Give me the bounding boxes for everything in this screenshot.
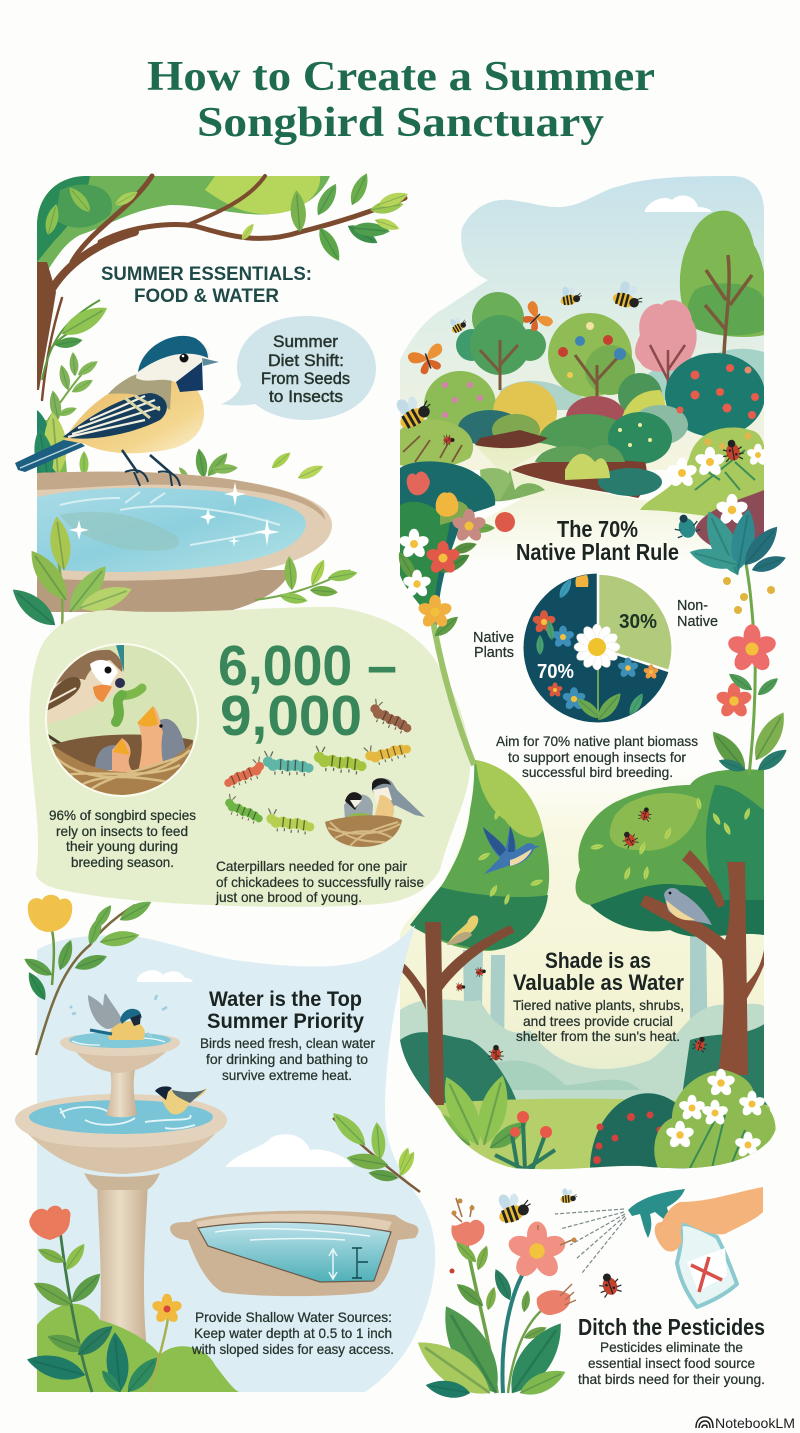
text: birds need water: for drinking and bathing to (206, 1051, 368, 1067)
hand (655, 1187, 763, 1252)
panel: water top priority blue (15, 895, 435, 1397)
text: pesticides eliminate: Pesticides eliminate the (600, 1339, 743, 1355)
green tree (456, 292, 546, 390)
tree trunk right (640, 850, 764, 1075)
circle: parent bird feeding chicks (44, 643, 199, 797)
text: pesticides eliminate: essential insect food source (588, 1355, 755, 1371)
pie labels: Native (677, 614, 718, 630)
icon: chickadee on bath rim (15, 336, 219, 486)
pie labels: Native (473, 630, 514, 646)
pie labels (473, 598, 718, 661)
panel: insect food pale green blob (29, 607, 470, 907)
big number: 9,000 (220, 684, 362, 748)
right branch (327, 1107, 420, 1192)
right flower vine (687, 506, 792, 776)
side sprig leaves (30, 300, 326, 483)
text: 96 percent: rely on insects to feed (56, 823, 188, 839)
speech bubble: summer diet shift: Summer (273, 333, 339, 351)
heading: water top priority: Summer Priority (207, 1009, 364, 1033)
text: caterpillars needed: Caterpillars needed for one pair (216, 858, 407, 874)
heading: shade is as valuable: Valuable as Water (513, 970, 684, 995)
heading: 70% rule: Native Plant Rule (516, 539, 679, 565)
forest insects (456, 806, 710, 1060)
speech bubble: summer diet shift: Diet Shift: (268, 352, 344, 370)
panel: ditch the pesticides (409, 1187, 765, 1406)
heading: water top priority: Water is the Top (209, 987, 362, 1011)
big number (218, 634, 397, 748)
shallow water basin diagram (170, 1211, 418, 1296)
tree branch (42, 176, 405, 400)
pie chart 70/30: 30% (619, 611, 657, 633)
caterpillar (122, 688, 142, 695)
pie labels: Plants (474, 645, 514, 661)
insects and butterflies (390, 279, 745, 542)
title: Songbird Sanctuary (197, 100, 604, 146)
flowers (409, 1198, 576, 1406)
speech bubble: summer diet shift (221, 316, 376, 420)
vine leaves (394, 523, 495, 640)
bushes (424, 353, 765, 470)
canopy leaf highlights (477, 797, 752, 906)
bird bath bowl (37, 472, 332, 612)
pie labels: Non- (677, 598, 708, 614)
title (147, 54, 655, 146)
text: provide shallow water: with sloped sides for easy access. (191, 1341, 394, 1357)
tree canopy left (410, 760, 549, 951)
panel: the 70 percent native plant rule (473, 516, 718, 780)
heading: ditch the pesticides: Ditch the Pesticides (578, 1314, 765, 1340)
insects (450, 1187, 623, 1298)
text: pesticides eliminate (578, 1339, 765, 1387)
title: How to Create a Summer (147, 54, 655, 100)
text: provide shallow water (191, 1309, 394, 1357)
text: 96 percent: their young during (66, 838, 178, 854)
garden path and soil beds (400, 419, 712, 550)
foreground plants (24, 1206, 240, 1397)
text: birds need water: survive extreme heat. (222, 1067, 352, 1083)
text: caterpillars needed: of chickadees to successfully raise (216, 874, 424, 890)
text: 96 percent: breeding season. (71, 854, 174, 870)
text: caterpillars needed (215, 858, 424, 905)
heading: 70% rule: The 70% (557, 516, 638, 542)
text: provide shallow water: Keep water depth at 0.5 to 1 inch (194, 1325, 392, 1341)
speech bubble: summer diet shift: to Insects (269, 388, 343, 406)
tree trunk left (400, 922, 515, 1105)
panel: shade forest (400, 760, 776, 1170)
pie chart 70/30: 70% (537, 661, 574, 683)
parent bird (116, 645, 124, 672)
tree canopy right (576, 769, 764, 937)
big number: 6,000 – (218, 634, 397, 698)
native plant text: successful bird breeding. (522, 764, 673, 780)
text: caterpillars needed: just one brood of young. (215, 889, 362, 905)
clouds (137, 970, 354, 1167)
sky and background (400, 176, 770, 560)
nest with chickadees (325, 778, 425, 847)
vine flowers (398, 471, 515, 629)
text: tiered native plants: and trees provide crucial (523, 1013, 673, 1029)
nest back and chicks (52, 735, 193, 770)
text: tiered native plants (513, 997, 684, 1044)
bath foreground leaves (7, 515, 358, 633)
spray dashes (555, 1209, 626, 1273)
background trees and hills (400, 935, 770, 1170)
speech bubble: summer diet shift: From Seeds (261, 370, 350, 388)
text: pesticides eliminate: that birds need for their young. (578, 1371, 765, 1387)
section heading: summer essentials (101, 263, 312, 307)
fountain birds (70, 994, 207, 1114)
heading: 70% rule (516, 516, 679, 565)
text: tiered native plants: Tiered native plants, shrubs, (513, 997, 684, 1013)
pink tree (635, 300, 697, 384)
text: 96 percent (49, 807, 196, 870)
flowering tree (548, 313, 635, 405)
big tree (680, 211, 767, 358)
heading: shade is as valuable (513, 948, 684, 995)
text: birds need water: Birds need fresh, clean water (200, 1035, 375, 1051)
section heading: summer essentials: FOOD & WATER (134, 285, 279, 307)
text: 96 percent: 96% of songbird species (49, 807, 196, 823)
nest front (52, 742, 193, 795)
native plant text (496, 733, 698, 780)
foliage canopy and branch (37, 176, 330, 490)
right foreground bushes (640, 428, 770, 552)
icon: daisy (574, 624, 620, 670)
text: provide shallow water: Provide Shallow Water Sources: (195, 1309, 392, 1325)
NotebookLM logo: NotebookLM (715, 1415, 795, 1431)
foreground plants (414, 1069, 776, 1170)
text: tiered native plants: shelter from the sun's heat. (516, 1028, 680, 1044)
pie chart 70/30 (524, 573, 673, 724)
left flower vine (394, 461, 515, 765)
caterpillars (220, 698, 417, 835)
native plant text: to support enough insects for (508, 749, 686, 765)
native plant text: Aim for 70% native plant biomass (496, 733, 698, 749)
heading: shade is as valuable: Shade is as (545, 948, 651, 973)
text: birds need water (200, 1035, 375, 1083)
spray bottle (628, 1189, 737, 1307)
section heading: summer essentials: SUMMER ESSENTIALS: (101, 263, 312, 285)
yellow flower and branch (21, 895, 154, 1055)
branch leaves (42, 171, 410, 264)
heading: water top priority (207, 987, 364, 1033)
tiered fountain (15, 994, 227, 1360)
panel: garden scene, build a safe haven (390, 176, 770, 560)
forest birds (447, 826, 712, 945)
panel: summer essentials food and water (7, 171, 410, 633)
